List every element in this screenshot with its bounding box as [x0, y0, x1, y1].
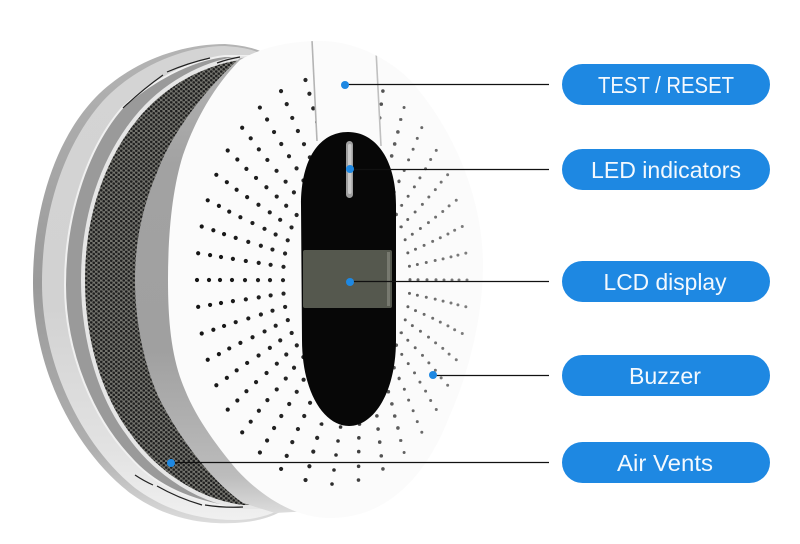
leader: buzzer	[429, 371, 549, 379]
air vent mesh	[85, 60, 300, 505]
label: TEST / RESET: TEST / RESET	[598, 72, 734, 98]
label: LED indicators	[562, 149, 770, 190]
speaker holes	[197, 76, 467, 484]
leader: test reset	[341, 81, 549, 89]
ring inner gray groove	[65, 56, 300, 506]
label: Air Vents	[562, 442, 770, 483]
mesh white trim	[85, 60, 300, 505]
ring seams	[123, 57, 243, 507]
LCD screen	[303, 250, 392, 308]
label: Air Vents: Air Vents	[617, 450, 713, 476]
leader: LED indicators	[346, 165, 549, 173]
leader: LCD display	[346, 278, 549, 286]
label: LED indicators: LED indicators	[591, 157, 741, 183]
label: Buzzer: Buzzer	[629, 363, 701, 389]
label: Buzzer	[562, 355, 770, 396]
LED light strip	[346, 141, 353, 198]
ring light band	[42, 46, 330, 520]
smoke alarm device	[33, 35, 483, 523]
label: TEST / RESET	[562, 64, 770, 105]
leader: air vents	[167, 459, 549, 467]
label: LCD display	[562, 261, 770, 302]
gray side rim	[135, 50, 330, 513]
outer mounting ring	[33, 44, 330, 523]
label: LCD display: LCD display	[604, 269, 727, 295]
black display panel	[301, 132, 396, 426]
test reset button	[312, 35, 381, 150]
white front face	[168, 41, 483, 518]
